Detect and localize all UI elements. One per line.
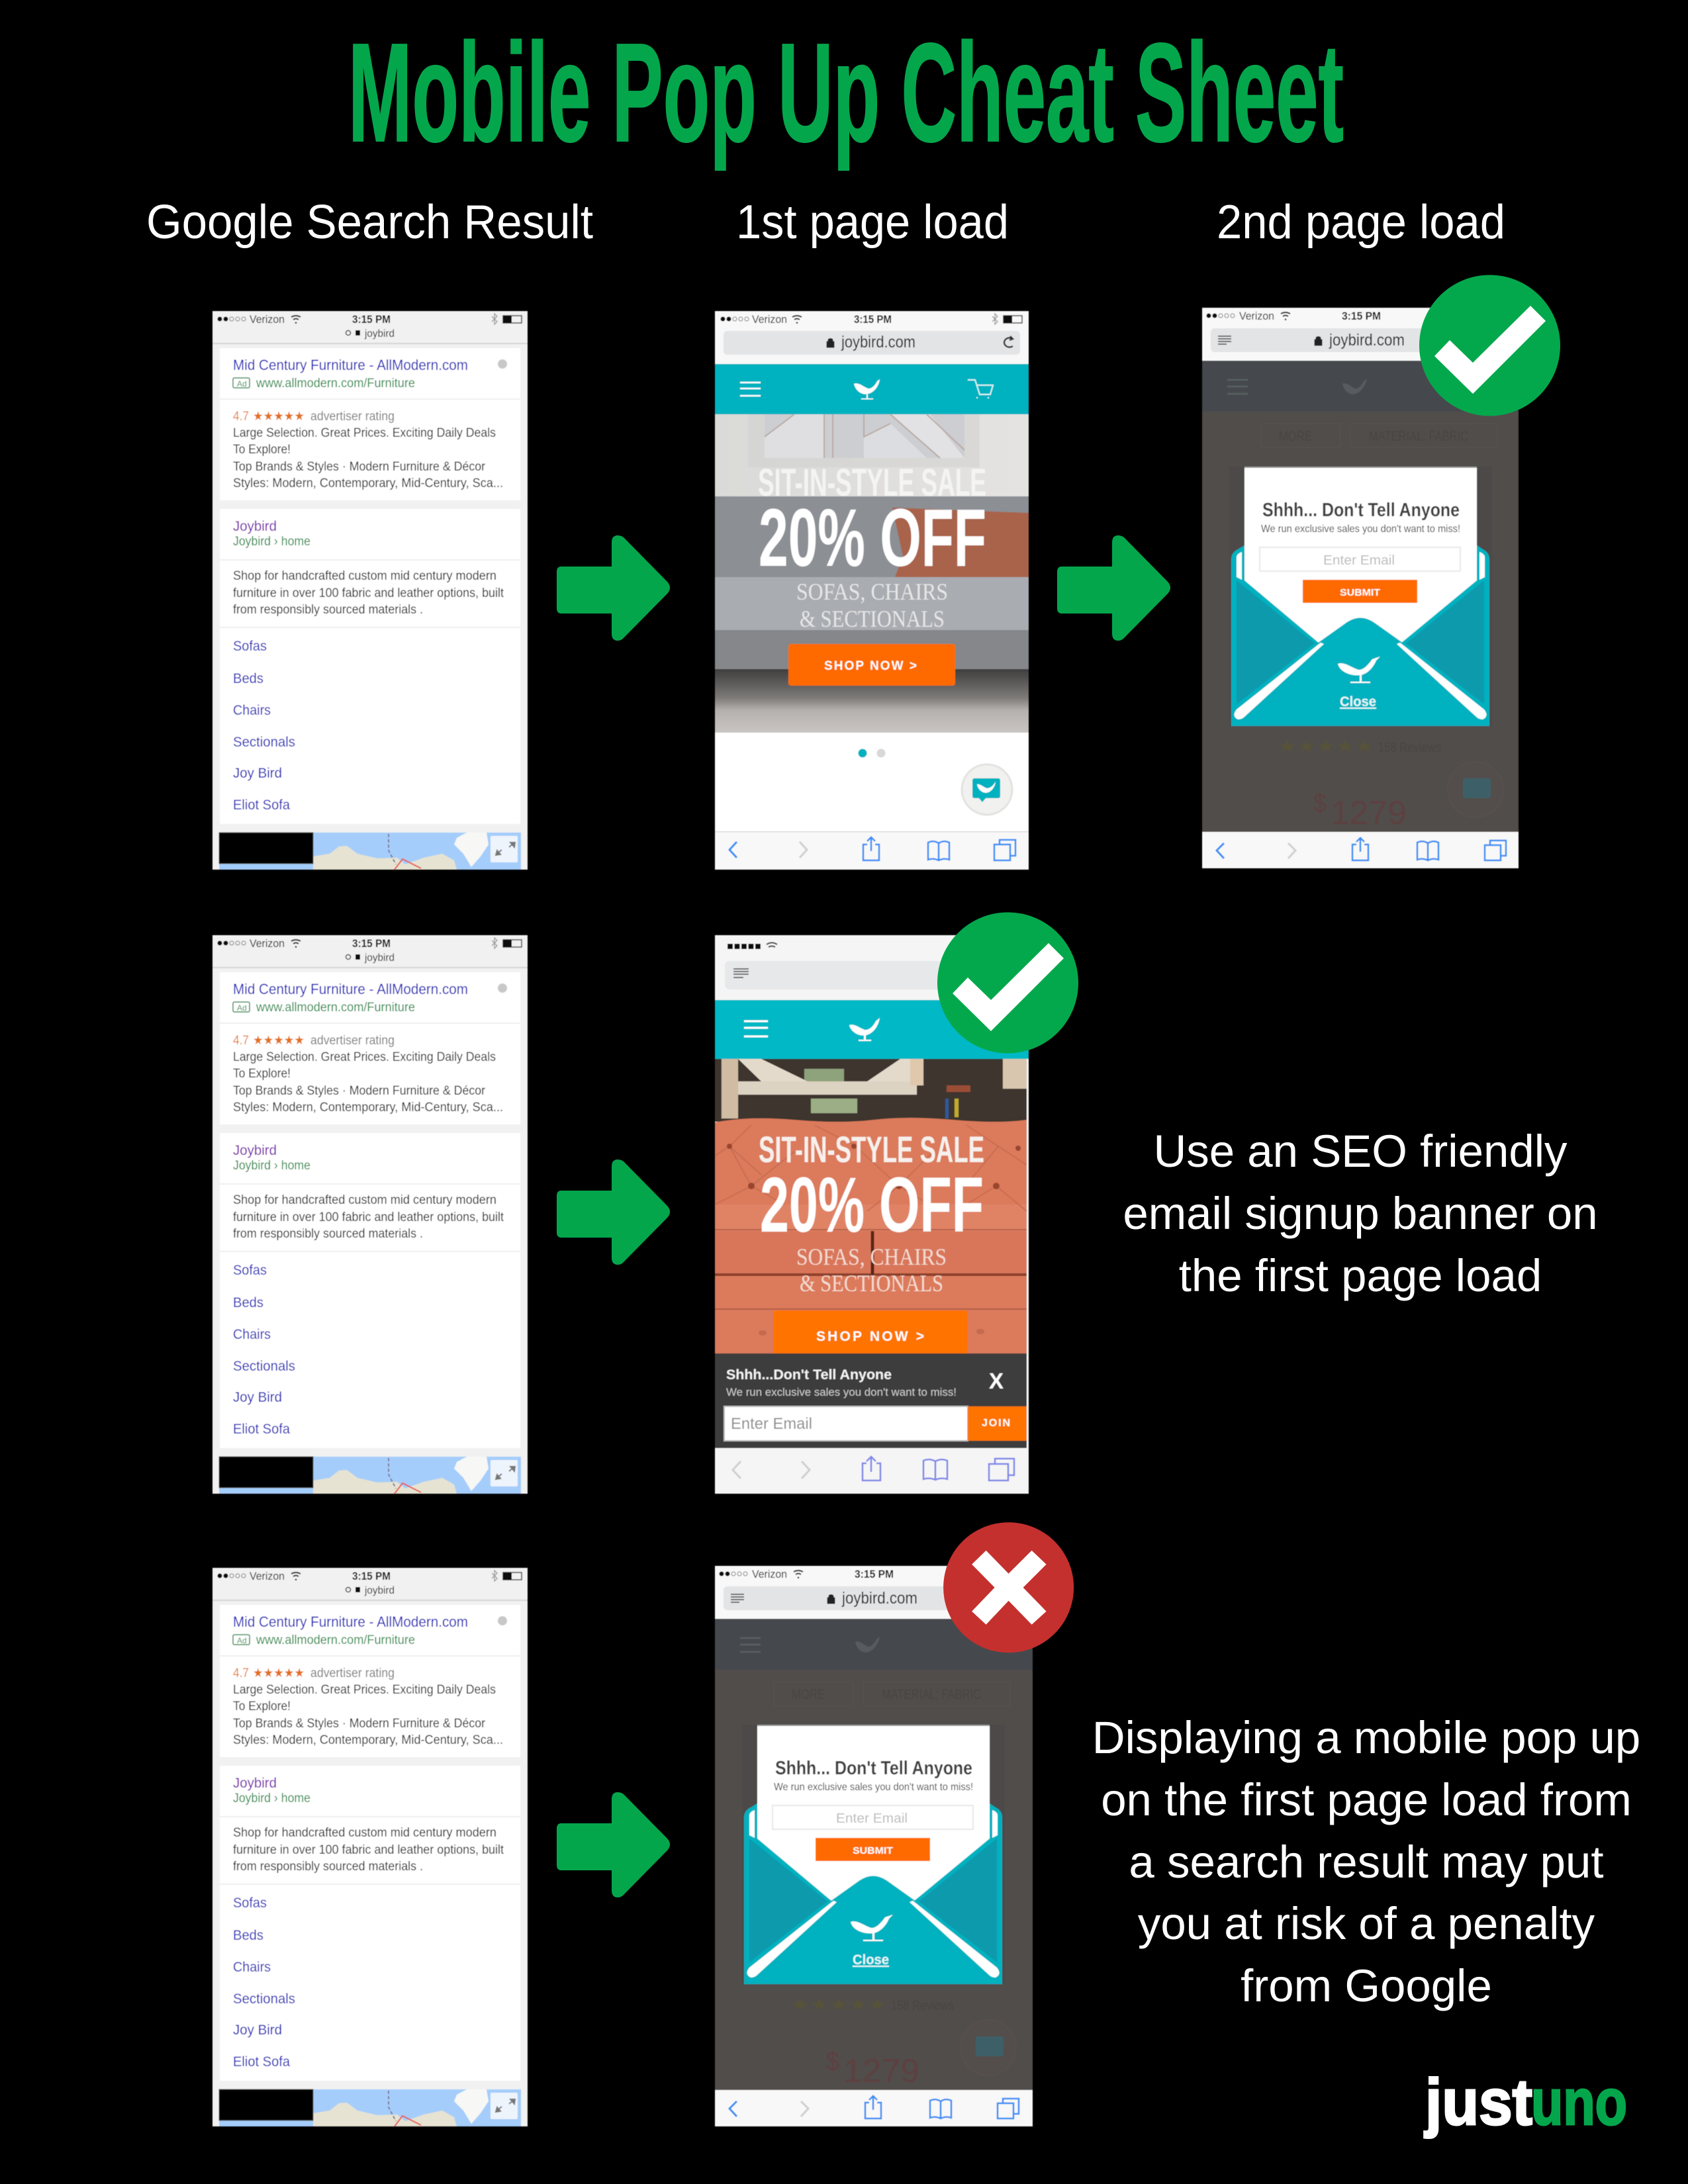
phone: search result row 3: Sectionals: [233, 1991, 295, 2007]
phone: search result row 2: 3:15 PM: [352, 937, 391, 950]
phone: search result row 3: Verizon: [250, 1570, 285, 1582]
phone: search result row 1: Chairs: [233, 703, 271, 718]
arrow: first load to second load: [1057, 535, 1170, 641]
phone: first page load with sale banner: SIT-IN-STYLE SALE: [758, 461, 986, 504]
phone: search result row 3: 3:15 PM: [352, 1570, 391, 1582]
phone: first page load with envelope pop up (penalty risk): 158 Reviews: [891, 1999, 954, 2013]
phone: second page load with envelope pop up: 158 Reviews: [1378, 741, 1441, 755]
phone: search result row 3: Mid Century Furniture - AllModern.com: [233, 1614, 468, 1630]
phone: first page load with envelope pop up (penalty risk): Verizon: [752, 1568, 787, 1580]
phone: first page load with envelope pop up (penalty risk): $: [826, 2047, 839, 2076]
phone: second page load with envelope pop up: MORE: [1279, 429, 1312, 444]
phone: second page load with envelope pop up: Verizon: [1239, 310, 1274, 322]
phone: search result row 2: To Explore!: [233, 1067, 291, 1081]
phone: search result row 3: Shop for handcrafted custom mid century modern: [233, 1826, 496, 1840]
phone: first page load with envelope pop up (penalty risk): Shhh... Don't Tell Anyone: [775, 1758, 972, 1779]
phone: first page load with email signup banner: Enter Email: [731, 1415, 812, 1433]
phone: search result row 3: furniture in over 100 fabric and leather options, built: [233, 1843, 504, 1857]
column heading: Google Search Result: Google Search Result: [146, 196, 593, 249]
column heading: 2nd page load: 2nd page load: [1217, 196, 1505, 249]
phone: search result row 1: Joybird › home: [233, 535, 310, 549]
icon: green check badge row 2: [937, 912, 1078, 1054]
phone: search result row 3: Beds: [233, 1928, 263, 1943]
logo: justuno: uno: [1531, 2066, 1627, 2138]
phone: search result row 3: Top Brands & Styles · Modern Furniture & Décor: [233, 1717, 486, 1731]
phone: search result row 2: joybird: [364, 952, 395, 964]
phone: search result row 2: advertiser rating: [310, 1034, 395, 1048]
phone: search result row 1: Sectionals: [233, 735, 295, 750]
phone: search result row 2: from responsibly sourced materials .: [233, 1227, 423, 1241]
logo: justuno: [1424, 2066, 1627, 2138]
phone: search result row 1: ★★★★★: [253, 409, 305, 424]
phone: search result row 3: Large Selection. Great Prices. Exciting Daily Deals: [233, 1683, 496, 1697]
phone: search result row 3: joybird: [364, 1585, 395, 1596]
phone: search result row 2: furniture in over 100 fabric and leather options, built: [233, 1210, 504, 1224]
phone: first page load with envelope pop up (penalty risk): We run exclusive sales you don't want to miss!: [774, 1782, 973, 1793]
phone: search result row 2: Joy Bird: [233, 1390, 282, 1405]
phone: search result row 2: [212, 935, 528, 1494]
phone: first page load with email signup banner: 20% OFF: [760, 1161, 984, 1249]
phone: search result row 1: from responsibly sourced materials .: [233, 603, 423, 617]
phone: first page load with sale banner: [715, 311, 1029, 870]
phone: first page load with envelope pop up (penalty risk): MATERIAL: FABRIC: [882, 1687, 981, 1702]
phone: search result row 2: www.allmodern.com/Furniture: [256, 1001, 415, 1015]
phone: first page load with email signup banner: Shhh...Don't Tell Anyone: [726, 1367, 892, 1383]
phone: second page load with envelope pop up: 1279: [1331, 794, 1407, 831]
phone: first page load with envelope pop up (penalty risk): joybird.com: [841, 1589, 917, 1608]
phone: search result row 1: [212, 311, 528, 870]
phone: search result row 1: Mid Century Furniture - AllModern.com: [233, 357, 468, 373]
phone: second page load with envelope pop up: ★★★★★: [1278, 737, 1374, 756]
text block: penalty warning: on the first page load from: [1101, 1774, 1632, 1825]
phone: search result row 3: Sofas: [233, 1895, 267, 1911]
column heading: 1st page load: 1st page load: [736, 196, 1009, 249]
phone: search result row 3: Eliot Sofa: [233, 2054, 290, 2070]
text block: penalty warning: Displaying a mobile pop up: [1092, 1712, 1640, 1763]
phone: search result row 2: Joybird › home: [233, 1159, 310, 1173]
arrow: row 1 search to first load: [557, 535, 670, 641]
phone: second page load with envelope pop up: SUBMIT: [1340, 587, 1380, 598]
phone: first page load with envelope pop up (penalty risk): Enter Email: [836, 1811, 908, 1826]
phone: search result row 1: furniture in over 100 fabric and leather options, built: [233, 586, 504, 600]
phone: search result row 1: 4.7: [233, 410, 249, 424]
phone: search result row 2: Ad: [237, 1003, 247, 1013]
phone: search result row 3: Chairs: [233, 1960, 271, 1975]
phone: search result row 3: Ad: [237, 1636, 247, 1645]
phone: search result row 3: advertiser rating: [310, 1666, 395, 1680]
phone: search result row 2: Large Selection. Great Prices. Exciting Daily Deals: [233, 1050, 496, 1064]
phone: search result row 3: Styles: Modern, Contemporary, Mid-Century, Sca...: [233, 1733, 503, 1747]
phone: second page load with envelope pop up: Close: [1340, 694, 1376, 709]
phone: search result row 1: Eliot Sofa: [233, 797, 290, 813]
arrow: row 3: [557, 1792, 670, 1897]
phone: first page load with sale banner: 3:15 PM: [854, 313, 892, 326]
logo: justuno: just: [1424, 2066, 1532, 2138]
phone: search result row 2: Verizon: [250, 937, 285, 950]
phone: first page load with sale banner: joybird.com: [841, 333, 915, 351]
phone: search result row 1: 3:15 PM: [352, 313, 391, 326]
phone: search result row 1: To Explore!: [233, 443, 291, 457]
phone: second page load with envelope pop up: We run exclusive sales you don't want to miss!: [1261, 523, 1460, 535]
phone: search result row 1: Verizon: [250, 313, 285, 326]
phone: first page load with envelope pop up (penalty risk): Close: [853, 1952, 889, 1968]
phone: first page load with sale banner: & SECTIONALS: [800, 606, 945, 632]
phone: first page load with envelope pop up (penalty risk): 3:15 PM: [855, 1568, 894, 1580]
phone: search result row 3: Joy Bird: [233, 2023, 282, 2038]
phone: first page load with sale banner: 20% OFF: [759, 493, 986, 584]
phone: search result row 3: 4.7: [233, 1666, 249, 1680]
phone: search result row 3: Joybird: [233, 1776, 277, 1791]
text block: penalty warning: you at risk of a penalty: [1138, 1898, 1595, 1949]
phone: first page load with email signup banner: We run exclusive sales you don't want to miss!: [726, 1386, 957, 1398]
phone: search result row 1: Joy Bird: [233, 766, 282, 781]
phone: search result row 2: Mid Century Furniture - AllModern.com: [233, 981, 468, 997]
phone: second page load with envelope pop up: $: [1313, 789, 1327, 818]
phone: search result row 3: To Explore!: [233, 1700, 291, 1713]
phone: search result row 2: Joybird: [233, 1143, 277, 1158]
phone: first page load with envelope pop up (penalty risk): ★★★★★: [790, 1995, 887, 2014]
phone: search result row 2: Styles: Modern, Contemporary, Mid-Century, Sca...: [233, 1101, 503, 1115]
phone: search result row 2: Shop for handcrafted custom mid century modern: [233, 1193, 496, 1207]
phone: first page load with envelope pop up (penalty risk): MORE: [792, 1687, 825, 1702]
phone: first page load with sale banner: Verizon: [752, 313, 787, 326]
phone: first page load with email signup banner: [715, 935, 1029, 1494]
phone: first page load with envelope pop up (penalty risk): 1279: [843, 2052, 919, 2089]
phone: first page load with envelope pop up (penalty risk): SUBMIT: [853, 1845, 893, 1856]
phone: search result row 1: Shop for handcrafted custom mid century modern: [233, 569, 496, 583]
phone: search result row 2: Eliot Sofa: [233, 1422, 290, 1437]
phone: search result row 3: from responsibly sourced materials .: [233, 1860, 423, 1874]
arrow: row 2: [557, 1160, 670, 1265]
phone: search result row 2: Chairs: [233, 1327, 271, 1342]
phone: search result row 2: 4.7: [233, 1034, 249, 1048]
phone: search result row 1: Styles: Modern, Contemporary, Mid-Century, Sca...: [233, 477, 503, 490]
phone: first page load with email signup banner: X: [989, 1369, 1004, 1393]
phone: first page load with email signup banner: SOFAS, CHAIRS: [796, 1244, 947, 1270]
phone: search result row 1: Ad: [237, 379, 247, 388]
phone: search result row 2: Beds: [233, 1295, 263, 1310]
phone: search result row 3: Joybird › home: [233, 1792, 310, 1805]
icon: green check badge row 1: [1419, 275, 1560, 416]
text block: SEO friendly banner advice: the first page load: [1179, 1250, 1542, 1301]
phone: second page load with envelope pop up: joybird.com: [1329, 331, 1405, 349]
phone: search result row 1: Sofas: [233, 639, 267, 654]
phone: search result row 1: Joybird: [233, 519, 277, 534]
phone: search result row 2: Sofas: [233, 1263, 267, 1278]
phone: second page load with envelope pop up: 3:15 PM: [1342, 310, 1381, 322]
phone: search result row 2: Sectionals: [233, 1359, 295, 1374]
phone: second page load with envelope pop up: [1202, 308, 1519, 868]
phone: second page load with envelope pop up: Enter Email: [1323, 553, 1395, 568]
phone: search result row 1: Top Brands & Styles · Modern Furniture & Décor: [233, 460, 486, 474]
phone: search result row 1: Large Selection. Great Prices. Exciting Daily Deals: [233, 426, 496, 440]
phone: first page load with email signup banner: SIT-IN-STYLE SALE: [759, 1128, 984, 1170]
phone: search result row 1: joybird: [364, 328, 395, 340]
phone: search result row 1: Beds: [233, 671, 263, 686]
phone: first page load with email signup banner: JOIN: [982, 1418, 1010, 1429]
phone: second page load with envelope pop up: MATERIAL: FABRIC: [1369, 429, 1468, 444]
phone: search result row 3: ★★★★★: [253, 1666, 305, 1680]
icon: red cross badge: [943, 1522, 1074, 1653]
phone: search result row 3: www.allmodern.com/Furniture: [256, 1633, 415, 1647]
text block: penalty warning: from Google: [1241, 1960, 1492, 2011]
phone: search result row 1: www.allmodern.com/Furniture: [256, 377, 415, 390]
phone: search result row 2: Top Brands & Styles · Modern Furniture & Décor: [233, 1084, 486, 1098]
phone: first page load with sale banner: SHOP NOW >: [824, 659, 917, 673]
text block: SEO friendly banner advice: email signup banner on: [1123, 1188, 1598, 1239]
phone: first page load with email signup banner: & SECTIONALS: [800, 1270, 943, 1297]
phone: search result row 2: ★★★★★: [253, 1033, 305, 1048]
phone: search result row 3: [212, 1568, 528, 2126]
text block: SEO friendly banner advice: Use an SEO friendly: [1153, 1126, 1568, 1177]
phone: second page load with envelope pop up: Shhh... Don't Tell Anyone: [1262, 500, 1460, 521]
phone: first page load with email signup banner: SHOP NOW >: [816, 1329, 924, 1344]
phone: first page load with sale banner: SOFAS, CHAIRS: [796, 578, 948, 605]
phone: first page load with envelope pop up (penalty risk): [715, 1566, 1033, 2126]
text block: penalty warning: a search result may put: [1129, 1837, 1604, 1888]
phone: search result row 1: advertiser rating: [310, 410, 395, 424]
